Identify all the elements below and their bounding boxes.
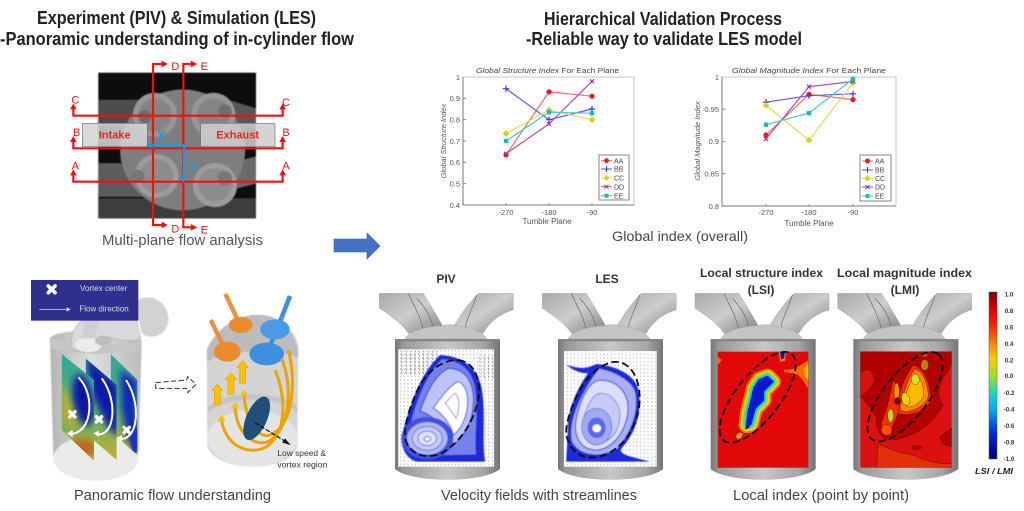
y axis ticks: 1 (715, 73, 719, 82)
heading: local structure index (700, 266, 823, 297)
legend: BB (875, 168, 885, 175)
streamline blob (401, 355, 485, 462)
x axis ticks and label: -90 (587, 208, 597, 217)
heading: local magnitude index: (LMI) (891, 283, 919, 297)
streamline blob (566, 364, 650, 462)
panel: LSI contour (695, 293, 829, 480)
label: low speed and vortex region: vortex region (277, 460, 327, 469)
title: hierarchical validation process (526, 9, 802, 49)
section plane letters: E (201, 224, 208, 236)
x axis ticks and label: -270 (498, 208, 514, 217)
XY axes: X (158, 128, 166, 142)
caption: local index: Local index (point by point) (733, 488, 909, 504)
label box: intake: Intake (99, 130, 131, 142)
x axis ticks and label: Tumble Plane (522, 217, 572, 226)
legend: CC (614, 176, 624, 183)
colorbar: -1.0 (1004, 456, 1015, 463)
panel: PIV streamlines (379, 293, 513, 480)
legend (599, 155, 629, 200)
x axis ticks and label: Tumble Plane (784, 219, 834, 228)
colorbar: -0.4 (1004, 406, 1015, 414)
legend: EE (875, 194, 885, 201)
heading: local structure index: (LSI) (748, 283, 774, 297)
x axis ticks and label: -180 (801, 208, 817, 217)
dashed vortex boundary (405, 360, 479, 456)
y axis ticks: 0.95 (704, 105, 719, 114)
curved flow arrows (217, 350, 292, 450)
legend: AA (614, 158, 624, 165)
panel: multi-plane engine top view (70, 61, 290, 236)
y axis ticks: 0.5 (450, 180, 460, 188)
heading: local magnitude index: Local magnitude index (837, 266, 972, 280)
legend box: Vortex center (80, 284, 128, 293)
heading: local structure index: Local structure index (700, 266, 823, 280)
dashed arrow (156, 377, 196, 393)
caption: velocity fields with streamlines: Velocity fields with streamlines (441, 488, 637, 504)
chart: global structure index: Global Structure Index For Each Plane (476, 66, 619, 75)
legend: CC (875, 176, 885, 183)
caption: global index: Global index (overall) (612, 228, 748, 244)
y axis ticks (450, 73, 460, 210)
legend: EE (614, 193, 624, 200)
data series (766, 79, 853, 140)
legend box: Flow direction (79, 304, 129, 313)
colorbar: 0.0 (1005, 373, 1014, 380)
low speed vortex disc (238, 393, 276, 444)
label: low speed and vortex region: Low speed & (277, 449, 327, 458)
dashed ellipse (706, 340, 809, 454)
x axis ticks and label (758, 208, 858, 228)
section plane letters: E (201, 61, 208, 73)
contour regions (860, 352, 952, 468)
chart: global magnitude index: Global Magnitude Index For Each Plane (732, 66, 886, 75)
panel: panoramic flow illustration (31, 280, 327, 481)
section plane letters: B (282, 127, 290, 139)
section plane letters: C (71, 95, 79, 107)
colorbar: 0.2 (1005, 358, 1014, 364)
section plane letters: A (72, 160, 80, 172)
legend: DD (614, 184, 624, 191)
caption: multi-plane flow analysis: Multi-plane flow analysis (102, 233, 263, 249)
title: hierarchical validation process: Hierarchical Validation Process (544, 9, 782, 29)
colorbar: 0.4 (1005, 341, 1014, 348)
section plane letters (71, 61, 290, 236)
y axis ticks (704, 73, 719, 211)
y axis ticks: 0.85 (704, 170, 719, 178)
y axis ticks: 0.6 (450, 158, 460, 167)
y axis ticks: 0.4 (450, 201, 460, 210)
colorbar: -0.6 (1004, 423, 1015, 430)
y axis label: Global Magnitude Index (693, 101, 702, 181)
chart: global magnitude index (693, 66, 896, 228)
chart: global structure index (439, 66, 634, 226)
XY axes: Y (190, 159, 198, 173)
section plane letters: D (171, 61, 179, 73)
cylinder with measurement planes (50, 297, 168, 481)
dashed ellipse (854, 341, 956, 453)
blue valves (249, 296, 290, 365)
contour blobs (718, 352, 808, 440)
legend: DD (875, 185, 885, 192)
legend (860, 155, 891, 201)
section plane lines (70, 61, 286, 231)
pointer arrow (255, 423, 291, 445)
heading: LES: LES (595, 272, 619, 286)
legend: AA (875, 159, 885, 166)
heading: PIV: PIV (436, 272, 456, 286)
heading: local magnitude index (837, 266, 972, 297)
x axis ticks and label: -180 (541, 208, 557, 217)
flow arcs (67, 377, 136, 441)
engine head image (98, 73, 256, 218)
section plane letters: A (282, 160, 290, 172)
title: experiment and simulation: -Panoramic understanding of in-cylinder flow (0, 29, 355, 49)
x axis ticks and label (498, 208, 597, 226)
plane 1 (62, 354, 94, 460)
colorbar: -0.2 (1004, 390, 1015, 397)
y axis ticks: 0.7 (450, 137, 460, 146)
y axis ticks: 1 (456, 73, 460, 82)
data series (506, 81, 592, 155)
section plane letters: C (282, 97, 290, 109)
y axis ticks: 0.8 (709, 202, 719, 211)
title: experiment and simulation (0, 8, 355, 49)
colorbar: -0.8 (1004, 440, 1015, 446)
section plane letters: D (171, 224, 179, 236)
title: experiment and simulation: Experiment (PIV) & Simulation (LES) (37, 8, 316, 28)
x axis ticks and label: -90 (848, 208, 858, 217)
panel: LMI contour (838, 293, 972, 480)
title: hierarchical validation process: -Reliable way to validate LES model (526, 29, 802, 49)
colorbar: 0.8 (1005, 308, 1014, 315)
label box: exhaust: Exhaust (216, 130, 259, 142)
dashed vortex boundary (566, 362, 640, 457)
y axis ticks: 0.9 (709, 137, 719, 146)
panel: LES streamlines (542, 293, 676, 480)
orange valves (211, 294, 253, 362)
legend box (31, 280, 138, 321)
colorbar: 0.6 (1005, 324, 1014, 332)
x axis ticks and label: -270 (758, 208, 774, 217)
section plane letters: B (73, 127, 80, 139)
plane 3 (111, 353, 140, 457)
y axis ticks: 0.9 (450, 94, 460, 103)
colorbar: LSI / LMI (975, 466, 1014, 476)
label box: intake (82, 123, 147, 147)
caption: panoramic flow understanding: Panoramic flow understanding (74, 488, 271, 504)
arrow: process direction (334, 233, 380, 259)
colorbar: 1.0 (1005, 292, 1014, 298)
colorbar (975, 292, 1015, 476)
label: low speed and vortex region (277, 449, 327, 469)
label box: exhaust (201, 123, 275, 147)
y axis label: Global Structure Index (439, 103, 448, 178)
XY axes (146, 128, 198, 183)
plane 2 (86, 355, 118, 461)
block arrows (212, 361, 248, 405)
y axis ticks: 0.8 (450, 116, 460, 124)
legend: BB (614, 167, 624, 174)
cylinder with flow schematic (207, 294, 327, 469)
vortex center markers (70, 412, 129, 433)
